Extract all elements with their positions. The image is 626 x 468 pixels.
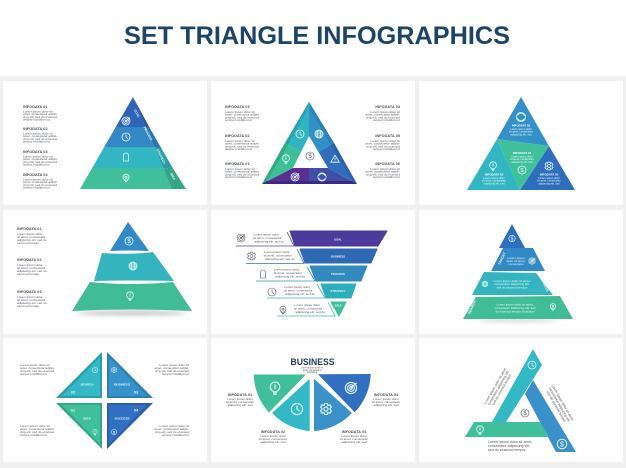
triangle labels: sit amet, consectetur bbox=[482, 179, 506, 183]
right text blocks: cing elit, sed do eiusmod bbox=[366, 115, 400, 119]
text blocks: eiusmod tempor bbox=[17, 272, 39, 276]
text blocks: sit amet, consectetur bbox=[17, 298, 46, 302]
triangle labels: Lorem ipsum dolor bbox=[483, 176, 505, 180]
right text blocks: Lorem ipsum dolor sit bbox=[370, 110, 400, 114]
left text blocks: Lorem ipsum dolor sit bbox=[225, 110, 255, 114]
text blocks: Lorem ipsum dolor sit bbox=[23, 110, 53, 114]
tier labels: SEARCH bbox=[467, 300, 477, 315]
text blocks: adipiscing elit, sed do bbox=[17, 269, 47, 273]
pyramid layers bbox=[80, 97, 186, 189]
diamond text: Lorem ipsum dolor sit bbox=[20, 424, 50, 428]
diamond text: cing elit, sed do eiusmod bbox=[20, 430, 54, 434]
tier 1 bbox=[499, 224, 525, 248]
triangle labels: adipiscing elit, sed bbox=[538, 181, 560, 185]
panel: funnel bbox=[211, 210, 415, 334]
diamond labels: 02 bbox=[71, 390, 75, 394]
tier text: consectetur adipiscing elit, bbox=[494, 282, 530, 286]
text blocks: INFODATA 04 bbox=[23, 173, 48, 177]
diamond text: cing elit, sed do eiusmod bbox=[155, 430, 189, 434]
diamond labels: 03 bbox=[134, 390, 138, 394]
heading text: adipiscing bbox=[307, 372, 318, 374]
icon: centre dollar: $ bbox=[523, 411, 527, 417]
panel: business half-wheel bbox=[211, 338, 415, 462]
sector text: Lorem ipsum dolor bbox=[227, 397, 253, 401]
text blocks: sit amet, consectetur bbox=[17, 235, 46, 239]
tier labels bbox=[467, 251, 550, 315]
text blocks: Lorem ipsum dolor sit bbox=[23, 154, 53, 158]
right text blocks: tempor incididunt ut bbox=[373, 118, 400, 122]
tier shadow bbox=[77, 310, 187, 316]
pyramid strip labels: IDEA bbox=[169, 172, 177, 181]
text blocks: tempor incididunt ut bbox=[23, 186, 50, 190]
tier text: Lorem ipsum dolor sit amet, bbox=[493, 279, 531, 283]
panel: four-tier pyramid with labels bbox=[419, 210, 623, 334]
left text blocks: tempor incididunt ut bbox=[225, 118, 252, 122]
dollar sign: $ bbox=[127, 239, 131, 245]
funnel text: Lorem ipsum dolor bbox=[274, 268, 300, 272]
text blocks bbox=[23, 105, 58, 190]
diamond labels: SUCCESS bbox=[115, 416, 129, 420]
panel: layered pyramid with side strip bbox=[3, 81, 207, 205]
pyramid icons bbox=[122, 117, 130, 182]
left text blocks: cing elit, sed do eiusmod bbox=[225, 144, 259, 148]
right text blocks bbox=[365, 105, 401, 179]
ribbon dollar sign: $ bbox=[560, 442, 564, 448]
panel: three-tier floating pyramid bbox=[3, 210, 207, 334]
panel: ribbon triangle bbox=[419, 338, 623, 462]
tier labels: BUSINESS bbox=[538, 275, 550, 293]
diamond text: tempor incididunt ut bbox=[162, 433, 189, 437]
icon: centre dollar bbox=[521, 409, 529, 417]
sector text: INFODATA 01 bbox=[228, 393, 252, 397]
tier icons bbox=[482, 235, 556, 311]
bottom text: sed do eiusmod tempor bbox=[488, 448, 526, 452]
right rotated text: sed do eiusmod tempor bbox=[546, 390, 567, 424]
ribbon: green band bbox=[465, 422, 549, 437]
right text blocks: Lorem ipsum dolor sit bbox=[370, 139, 400, 143]
left triangle bbox=[467, 139, 520, 190]
sector text: sit amet, consectetur bbox=[259, 437, 287, 441]
right text blocks: amet, consectetur adipis- bbox=[365, 113, 400, 117]
text blocks: INFODATA 03 bbox=[17, 290, 42, 294]
tier text: do eiusmod tempor incididunt bbox=[495, 310, 535, 314]
sector text: INFODATA 03 bbox=[342, 430, 366, 434]
right text blocks: cing elit, sed do eiusmod bbox=[366, 172, 400, 176]
right triangle bbox=[520, 146, 575, 190]
triangle: idea bbox=[56, 403, 102, 449]
right text blocks: INFODATA 04 bbox=[375, 105, 401, 109]
left rotated text: sed do eiusmod tempor bbox=[491, 373, 513, 406]
sector text: sit amet, consectetur bbox=[340, 437, 368, 441]
funnel text: sit amet, consectetur bbox=[263, 254, 292, 258]
diamond text: cing elit, sed do eiusmod bbox=[155, 369, 189, 373]
right rotated text: Lorem ipsum dolor sit amet, bbox=[550, 384, 575, 422]
diamond text: tempor incididunt ut bbox=[20, 372, 47, 376]
sector text: INFODATA 02 bbox=[261, 430, 285, 434]
triangle labels: sit amet, consectetur bbox=[537, 179, 561, 183]
left text blocks bbox=[225, 105, 260, 179]
tier 3 bbox=[72, 282, 192, 311]
diamond text: tempor incididunt ut bbox=[20, 433, 47, 437]
left text blocks: INFODATA 02 bbox=[225, 134, 250, 138]
panel: diamond of four triangles bbox=[3, 338, 207, 462]
sector text: INFODATA 04 bbox=[374, 393, 399, 397]
text blocks: amet, consectetur adipis- bbox=[23, 112, 58, 116]
ribbon: blue band bbox=[525, 380, 576, 452]
tier dollar sign: $ bbox=[511, 236, 514, 242]
triangle labels: $ bbox=[520, 168, 524, 174]
triangle labels: adipiscing elit, sed bbox=[511, 160, 533, 164]
tier icons bbox=[125, 237, 137, 300]
triangle labels: INFODATA 05 bbox=[540, 172, 559, 176]
funnel icons bbox=[237, 234, 286, 314]
bottom text: consectetur adipiscing elit, bbox=[488, 444, 530, 448]
text blocks: amet, consectetur adipis- bbox=[23, 180, 58, 184]
text blocks: amet, consectetur adipis- bbox=[23, 157, 58, 161]
diamond labels: SEARCH bbox=[80, 382, 94, 386]
triangle: success bbox=[107, 403, 153, 449]
sector text: adipiscing elit, sed bbox=[341, 440, 367, 444]
diamond text: Lorem ipsum dolor sit bbox=[159, 424, 189, 428]
left text blocks: amet, consectetur adipis- bbox=[225, 113, 260, 117]
funnel labels: IDEA bbox=[335, 304, 341, 308]
triangle icons bbox=[283, 130, 339, 181]
text blocks: INFODATA 02 bbox=[17, 258, 42, 262]
triangle labels: INFODATA 03 bbox=[485, 172, 504, 176]
tier text: consectetur adipiscing elit, sed bbox=[495, 306, 536, 310]
text blocks: amet, consectetur adipis- bbox=[23, 134, 58, 138]
text blocks: adipiscing elit, sed do bbox=[17, 238, 47, 242]
text blocks: cing elit, sed do eiusmod bbox=[23, 160, 57, 164]
text blocks: Lorem ipsum dolor sit bbox=[23, 178, 53, 182]
tier 1 bbox=[110, 222, 149, 251]
text blocks: sit amet, consectetur bbox=[17, 266, 46, 270]
right text blocks: tempor incididunt ut bbox=[373, 175, 400, 179]
diamond icons bbox=[92, 367, 117, 435]
sector 4 bbox=[318, 374, 371, 412]
ribbon: teal band bbox=[492, 349, 542, 422]
funnel layers bbox=[290, 231, 387, 316]
sector icons bbox=[270, 382, 357, 415]
sector text bbox=[226, 393, 400, 444]
sector 1 bbox=[254, 374, 306, 412]
right text blocks: Lorem ipsum dolor sit bbox=[370, 167, 400, 171]
triangle labels bbox=[482, 124, 561, 185]
ribbon icons bbox=[477, 361, 567, 449]
left text blocks: INFODATA 01 bbox=[225, 162, 250, 166]
right text blocks: cing elit, sed do eiusmod bbox=[366, 144, 400, 148]
triangle labels: sit amet, consectetur bbox=[509, 130, 533, 134]
text blocks: eiusmod tempor bbox=[17, 241, 39, 245]
title: SET TRIANGLE INFOGRAPHICS bbox=[124, 22, 510, 50]
tier 3 bbox=[472, 272, 553, 295]
tier 2 bbox=[491, 248, 545, 271]
tier shadow bbox=[478, 319, 558, 322]
tier text: dolor sit amet, bbox=[507, 259, 526, 263]
funnel text: sit amet, consectetur bbox=[294, 306, 322, 310]
text blocks: INFODATA 01 bbox=[23, 105, 48, 109]
text blocks: Lorem ipsum dolor bbox=[17, 263, 43, 267]
sector 2 bbox=[272, 379, 310, 431]
diamond text bbox=[20, 363, 189, 437]
left rotated text: Lorem ipsum dolor sit amet, bbox=[483, 367, 508, 405]
diamond labels: 01 bbox=[71, 408, 75, 412]
bottom text bbox=[488, 440, 532, 452]
sector text: adipiscing elit, sed bbox=[227, 403, 253, 407]
funnel text: Lorem ipsum dolor bbox=[284, 285, 310, 289]
triangle labels: Lorem ipsum dolor bbox=[538, 176, 560, 180]
pyramid strip labels: GOAL bbox=[133, 109, 141, 119]
funnel text: adipiscing elit, sed do bbox=[275, 274, 305, 278]
tier text: sed do eiusmod tempor bbox=[496, 285, 528, 289]
triangle labels: adipiscing elit, sed bbox=[510, 132, 532, 136]
text blocks: INFODATA 03 bbox=[23, 150, 48, 154]
diamond text: Lorem ipsum dolor sit bbox=[20, 363, 50, 367]
funnel labels: GOAL bbox=[334, 238, 342, 242]
text blocks: INFODATA 01 bbox=[17, 227, 42, 231]
left text blocks: cing elit, sed do eiusmod bbox=[225, 172, 259, 176]
funnel text: adipiscing elit, sed do bbox=[285, 292, 315, 296]
text blocks: tempor incididunt ut bbox=[23, 140, 50, 144]
heading: BUSINESS bbox=[290, 357, 334, 367]
sector text: Lorem ipsum dolor bbox=[373, 397, 399, 401]
diamond text: amet, consectetur adipis- bbox=[154, 366, 189, 370]
diamond text: cing elit, sed do eiusmod bbox=[20, 369, 54, 373]
triangle labels: INFODATA 02 bbox=[512, 124, 531, 128]
funnel labels: BUSINESS bbox=[331, 254, 345, 258]
sector text: adipiscing elit, sed bbox=[373, 403, 399, 407]
funnel text: sit amet, consectetur bbox=[253, 236, 282, 240]
triangle labels: INFODATA 04 bbox=[513, 151, 532, 155]
sector text: Lorem ipsum dolor bbox=[341, 434, 367, 438]
text blocks: adipiscing elit, sed do bbox=[17, 301, 47, 305]
diamond text: amet, consectetur adipis- bbox=[154, 427, 189, 431]
text blocks: INFODATA 02 bbox=[23, 127, 48, 131]
funnel text: sit amet, consectetur bbox=[273, 271, 302, 275]
text blocks: cing elit, sed do eiusmod bbox=[23, 183, 57, 187]
text blocks: eiusmod tempor bbox=[17, 304, 39, 308]
funnel labels: STRATEGY bbox=[330, 289, 346, 293]
tier 4 bbox=[463, 296, 573, 319]
text blocks bbox=[17, 227, 47, 308]
panel: hollow triangle of six segments bbox=[211, 81, 415, 205]
heading text bbox=[301, 366, 323, 374]
funnel text: adipiscing elit, sed do bbox=[265, 257, 295, 261]
funnel text: Lorem ipsum dolor bbox=[294, 303, 320, 307]
left text blocks: Lorem ipsum dolor sit bbox=[225, 139, 255, 143]
diamond labels: BUSINESS bbox=[114, 382, 130, 386]
centre triangle bbox=[497, 139, 549, 190]
funnel text: sit amet, consectetur bbox=[284, 288, 312, 292]
pyramid strip labels: PROCESS bbox=[143, 126, 153, 141]
diamond text: Lorem ipsum dolor sit bbox=[159, 363, 189, 367]
triangle labels: sit amet, consectetur bbox=[510, 157, 534, 161]
text blocks: tempor incididunt ut bbox=[23, 163, 50, 167]
funnel labels: PROCESS bbox=[331, 272, 345, 276]
triangle labels: adipiscing elit, sed bbox=[483, 181, 505, 185]
diamond dollar sign: $ bbox=[113, 430, 116, 434]
triangle labels: Lorem ipsum dolor bbox=[511, 154, 533, 158]
left text blocks: tempor incididunt ut bbox=[225, 147, 252, 151]
diamond labels bbox=[71, 382, 139, 420]
funnel text bbox=[253, 232, 325, 314]
left rotated text: consectetur adipiscing elit, bbox=[487, 369, 510, 406]
triangle labels: Lorem ipsum dolor bbox=[510, 127, 532, 131]
left text blocks: amet, consectetur adipis- bbox=[225, 170, 260, 174]
funnel text: Lorem ipsum dolor bbox=[253, 232, 279, 236]
text blocks: Lorem ipsum dolor bbox=[17, 295, 43, 299]
text blocks: cing elit, sed do eiusmod bbox=[23, 115, 57, 119]
text blocks: Lorem ipsum dolor sit bbox=[23, 132, 53, 136]
diamond labels: IDEA bbox=[83, 416, 91, 420]
left text blocks: cing elit, sed do eiusmod bbox=[225, 115, 259, 119]
tier text: Lorem ipsum bbox=[507, 256, 525, 260]
left text blocks: Lorem ipsum dolor sit bbox=[225, 167, 255, 171]
heading text: amet, consectetur bbox=[303, 369, 321, 372]
pyramid strip labels bbox=[133, 109, 177, 181]
right text blocks: INFODATA 06 bbox=[375, 162, 400, 166]
panel: four-triangle pyramid bbox=[419, 81, 623, 205]
funnel labels bbox=[330, 238, 346, 308]
diamond text: amet, consectetur adipis- bbox=[20, 366, 55, 370]
diamond labels: 04 bbox=[134, 408, 139, 412]
right text blocks: amet, consectetur adipis- bbox=[365, 170, 400, 174]
tier text: Lorem ipsum dolor sit amet, bbox=[496, 302, 534, 306]
triangle icons bbox=[490, 112, 553, 174]
text blocks: tempor incididunt ut bbox=[23, 118, 50, 122]
tier text bbox=[493, 256, 536, 314]
triangle: search bbox=[56, 352, 102, 398]
tier labels: TARGET bbox=[497, 251, 507, 266]
funnel leader lines bbox=[236, 232, 335, 316]
bottom text: Lorem ipsum dolor sit amet, bbox=[488, 440, 532, 444]
diamond text: amet, consectetur adipis- bbox=[20, 427, 55, 431]
pyramid strip labels: STRATEGY bbox=[155, 148, 167, 166]
right text blocks: tempor incididunt ut bbox=[373, 147, 400, 151]
icon: dollar bbox=[306, 152, 314, 160]
funnel text: adipiscing elit, sed do bbox=[254, 240, 284, 244]
sector 3 bbox=[314, 379, 352, 431]
triangle: business bbox=[107, 352, 153, 398]
diamond text: tempor incididunt ut bbox=[162, 372, 189, 376]
sector text: Lorem ipsum dolor bbox=[260, 434, 286, 438]
tier 2 bbox=[94, 252, 174, 281]
right text blocks: amet, consectetur adipis- bbox=[365, 142, 400, 146]
right text blocks: INFODATA 05 bbox=[375, 134, 400, 138]
text blocks: cing elit, sed do eiusmod bbox=[23, 137, 57, 141]
left text blocks: amet, consectetur adipis- bbox=[225, 142, 260, 146]
text blocks: Lorem ipsum dolor bbox=[17, 232, 43, 236]
sector text: adipiscing elit, sed bbox=[260, 440, 286, 444]
funnel text: Lorem ipsum dolor bbox=[264, 250, 290, 254]
left text blocks: tempor incididunt ut bbox=[225, 175, 252, 179]
top triangle bbox=[497, 97, 549, 146]
sector text: sit amet, consectetur bbox=[372, 400, 400, 404]
left text blocks: INFODATA 03 bbox=[225, 105, 250, 109]
tier text: consectetur bbox=[508, 262, 524, 266]
right rotated text: consectetur adipiscing elit, bbox=[548, 387, 571, 423]
heading text: Lorem ipsum dolor sit bbox=[301, 366, 323, 370]
icon: dollar: $ bbox=[308, 154, 312, 160]
sector text: sit amet, consectetur bbox=[226, 400, 254, 404]
triangle segments bbox=[262, 102, 357, 184]
funnel text: adipiscing elit, sed do bbox=[295, 310, 325, 314]
